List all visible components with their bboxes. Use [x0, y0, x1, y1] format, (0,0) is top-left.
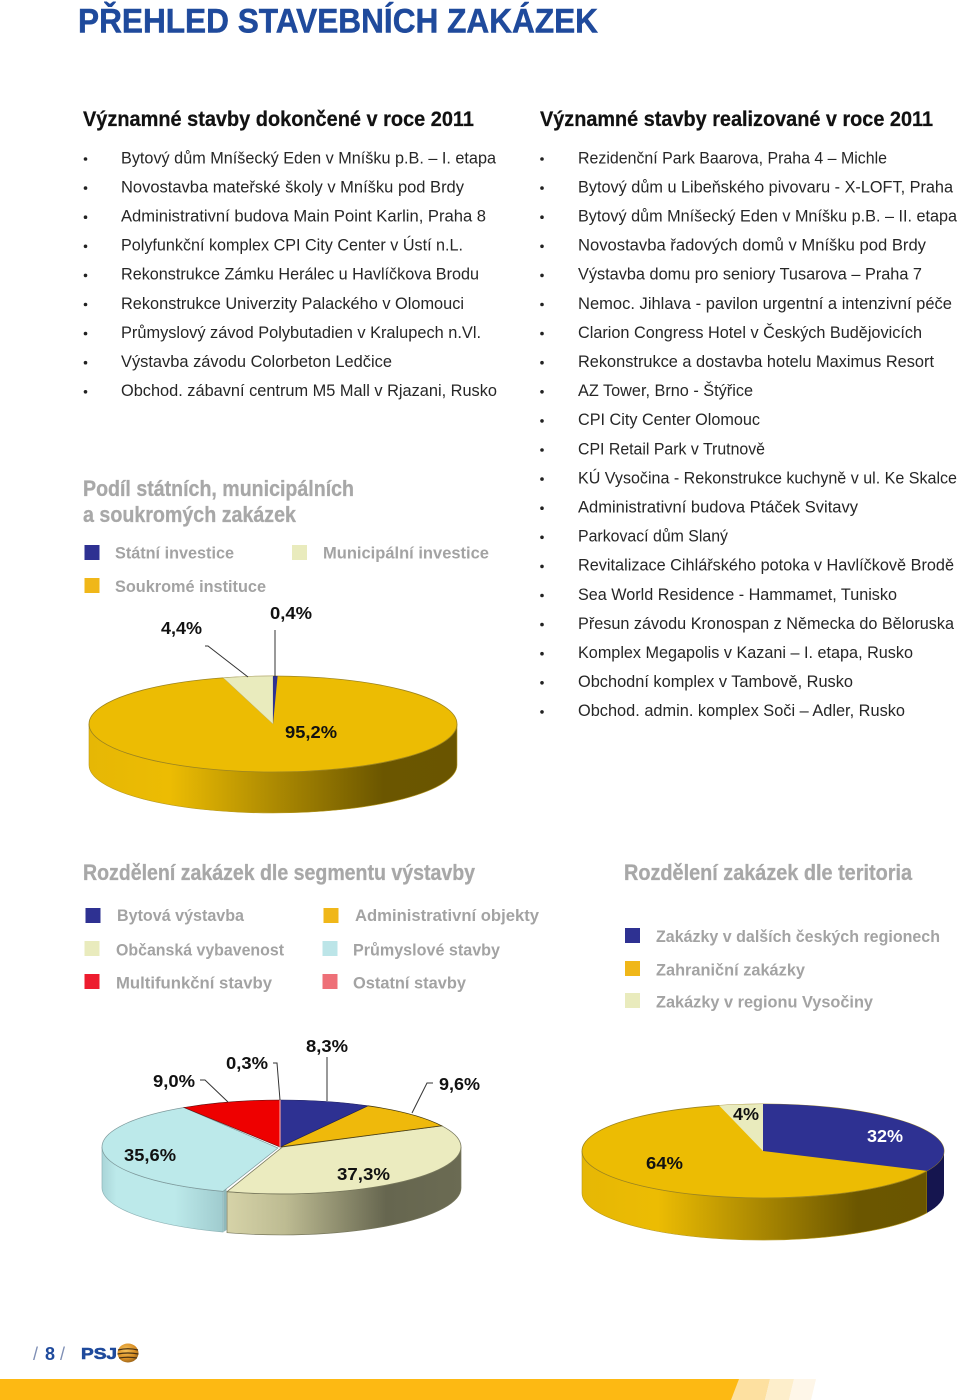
- list: ongoing buildings: [540, 149, 958, 720]
- page number: [33, 1344, 65, 1364]
- pie chart: construction segments: 0,3%: [226, 1053, 268, 1073]
- logo: PSJ: PSJ: [81, 1346, 117, 1363]
- pie chart: construction segments: 8,3%: [306, 1036, 348, 1056]
- heading: completed buildings: Významné stavby dokončené v roce 2011: [83, 107, 474, 131]
- list: completed buildings: [84, 149, 497, 400]
- legend: construction segments: Občanská vybavenost: [116, 942, 284, 960]
- page number: /: [60, 1344, 65, 1364]
- list: ongoing buildings: Clarion Congress Hotel v Českých Budějovicích: [578, 323, 922, 342]
- pie chart: territories: 64%: [646, 1153, 683, 1173]
- footer bar: [0, 1379, 816, 1400]
- legend: construction segments: [84, 907, 540, 992]
- list: ongoing buildings: Výstavba domu pro seniory Tusarova – Praha 7: [578, 266, 922, 284]
- pie chart: construction segments: 37,3%: [337, 1164, 390, 1184]
- pie chart: share of contracts: 95,2%: [285, 722, 337, 742]
- list: ongoing buildings: Komplex Megapolis v Kazani – I. etapa, Rusko: [578, 644, 913, 662]
- pie chart: territories: 32%: [867, 1126, 903, 1146]
- list: completed buildings: Obchod. zábavní centrum M5 Mall v Rjazani, Rusko: [121, 382, 497, 400]
- pie chart: share of contracts: [89, 603, 457, 813]
- legend: share of contracts: Soukromé instituce: [115, 578, 266, 596]
- pie chart: territories: 4%: [733, 1104, 759, 1124]
- page number: /: [33, 1344, 38, 1364]
- title: PŘEHLED STAVEBNÍCH ZAKÁZEK: [78, 2, 598, 40]
- list: ongoing buildings: CPI Retail Park v Trutnově: [578, 440, 765, 458]
- heading: share of public and private contracts: a soukromých zakázek: [83, 502, 297, 527]
- list: ongoing buildings: Revitalizace Cihlářského potoka v Havlíčkově Brodě: [578, 557, 954, 575]
- list: completed buildings: Novostavba mateřské školy v Mníšku pod Brdy: [121, 178, 465, 196]
- legend: share of contracts: Municipální investice: [323, 544, 489, 562]
- list: completed buildings: Výstavba závodu Colorbeton Ledčice: [121, 353, 392, 371]
- legend: construction segments: Multifunkční stavby: [116, 974, 273, 992]
- legend: construction segments: Bytová výstavba: [117, 907, 245, 925]
- list: ongoing buildings: Bytový dům Mníšecký Eden v Mníšku p.B. – II. etapa: [578, 208, 958, 226]
- pie chart: construction segments: 9,0%: [153, 1071, 195, 1091]
- list: ongoing buildings: Administrativní budova Ptáček Svitavy: [578, 498, 859, 516]
- list: ongoing buildings: Obchod. admin. komplex Soči – Adler, Rusko: [578, 702, 905, 720]
- legend: territories: Zakázky v dalších českých regionech: [656, 928, 940, 946]
- legend: construction segments: Průmyslové stavby: [353, 942, 501, 960]
- pie chart: territories: [582, 1104, 944, 1240]
- legend: construction segments: Administrativní objekty: [355, 907, 540, 925]
- list: ongoing buildings: Sea World Residence - Hammamet, Tunisko: [578, 586, 897, 604]
- list: ongoing buildings: AZ Tower, Brno - Štýřice: [578, 381, 753, 400]
- legend: territories: Zakázky v regionu Vysočiny: [656, 994, 874, 1012]
- pie chart: construction segments: [102, 1036, 480, 1235]
- list: ongoing buildings: Parkovací dům Slaný: [578, 528, 729, 546]
- list: completed buildings: Polyfunkční komplex CPI City Center v Ústí n.L.: [121, 236, 463, 255]
- list: completed buildings: Průmyslový závod Polybutadien v Kralupech n.Vl.: [121, 324, 481, 342]
- list: completed buildings: Rekonstrukce Univerzity Palackého v Olomouci: [121, 295, 464, 313]
- legend: territories: Zahraniční zakázky: [656, 962, 806, 980]
- list: completed buildings: Administrativní budova Main Point Karlin, Praha 8: [121, 208, 486, 226]
- list: ongoing buildings: Rekonstrukce a dostavba hotelu Maximus Resort: [578, 353, 934, 371]
- list: ongoing buildings: Obchodní komplex v Tambově, Rusko: [578, 673, 853, 691]
- heading: ongoing buildings: Významné stavby realizované v roce 2011: [540, 107, 933, 131]
- page number: 8: [45, 1344, 55, 1364]
- pie chart: construction segments: 35,6%: [124, 1145, 176, 1165]
- list: ongoing buildings: Bytový dům u Libeňského pivovaru - X-LOFT, Praha: [578, 178, 954, 196]
- heading: contracts by territory: Rozdělení zakázek dle teritoria: [624, 860, 913, 885]
- legend: territories: [625, 928, 940, 1012]
- legend: share of contracts: [84, 544, 489, 596]
- list: ongoing buildings: Rezidenční Park Baarova, Praha 4 – Michle: [578, 149, 887, 167]
- pie chart: construction segments: 9,6%: [439, 1074, 480, 1094]
- list: completed buildings: Rekonstrukce Zámku Herálec u Havlíčkova Brodu: [121, 266, 479, 284]
- pie chart: share of contracts: 0,4%: [270, 603, 312, 623]
- logo: PSJ: [81, 1344, 138, 1363]
- heading: contracts by construction segment: Rozdělení zakázek dle segmentu výstavby: [83, 860, 476, 885]
- list: ongoing buildings: KÚ Vysočina - Rekonstrukce kuchyně v ul. Ke Skalce: [578, 468, 957, 487]
- list: ongoing buildings: Novostavba řadových domů v Mníšku pod Brdy: [578, 237, 927, 255]
- list: completed buildings: Bytový dům Mníšecký Eden v Mníšku p.B. – I. etapa: [121, 149, 497, 167]
- list: ongoing buildings: CPI City Center Olomouc: [578, 411, 760, 429]
- legend: construction segments: Ostatní stavby: [353, 974, 467, 992]
- legend: share of contracts: Státní investice: [115, 544, 234, 562]
- list: ongoing buildings: Přesun závodu Kronospan z Německa do Běloruska: [578, 615, 955, 633]
- pie chart: share of contracts: 4,4%: [161, 618, 202, 638]
- heading: share of public and private contracts: Podíl státních, municipálních: [83, 476, 354, 501]
- list: ongoing buildings: Nemoc. Jihlava - pavilon urgentní a intenzivní péče: [578, 295, 952, 313]
- heading: share of public and private contracts: [83, 476, 354, 527]
